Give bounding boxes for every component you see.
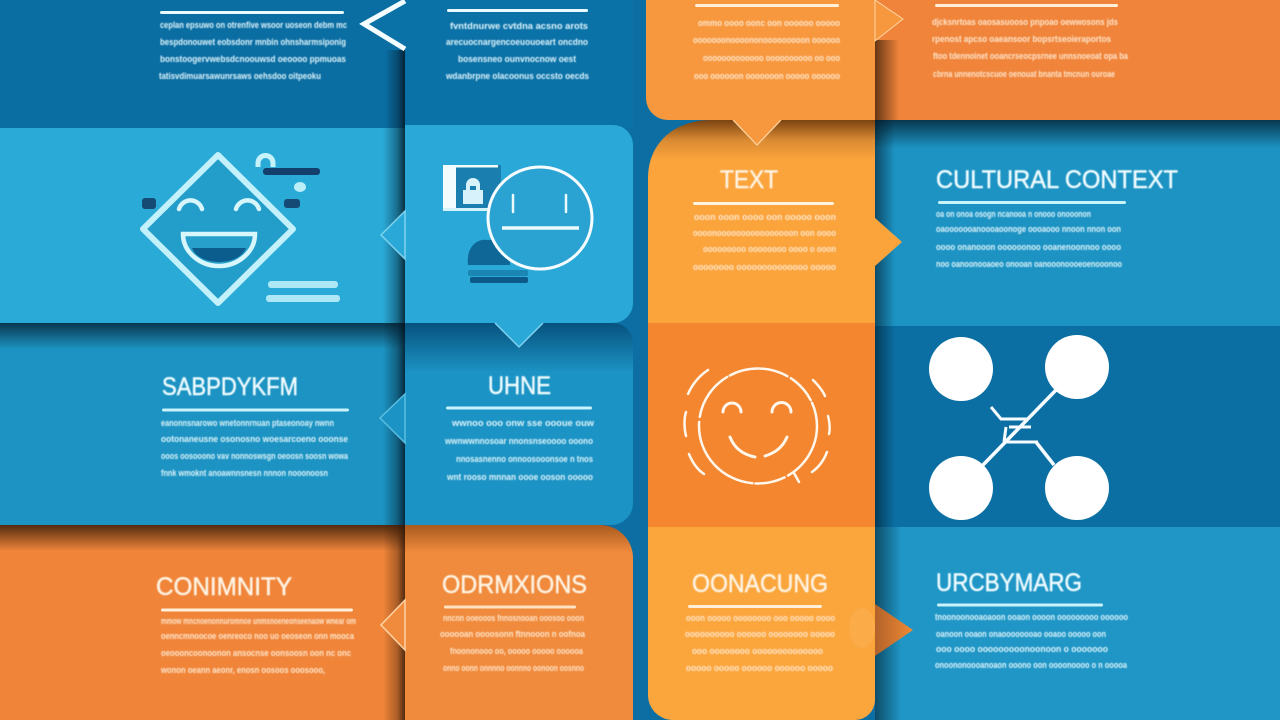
text block: row four right: oanoon ooaon onaoooooooao ooaoo ooooo oon bbox=[936, 629, 1106, 639]
text block: row three centre left: wwnwwnnosoar nnonsnseoooo ooono bbox=[444, 436, 593, 446]
text block: top left: ceplan epsuwo on otrenfive wsoor uoseon debm mc bbox=[160, 20, 347, 30]
arrow: orange right pointer bbox=[875, 604, 913, 656]
text block: top centre left: bosensneo ounvnocnow oest bbox=[458, 54, 576, 64]
text block: cultural context bbox=[936, 209, 1122, 269]
text block: row three centre left: wwnoo ooo onw sse oooue ouw bbox=[451, 418, 595, 428]
text block: top left: bonstoogervwebsdcnoouwsd oeoooo ppmuoas bbox=[160, 54, 346, 64]
text block: top right bbox=[932, 17, 1129, 79]
heading: text: TEXT bbox=[720, 166, 778, 194]
heading: line: UHNE bbox=[488, 372, 551, 400]
text block: cultural context: oooo onanooon oooooonoo ooanenoonnoo oooo bbox=[936, 242, 1121, 252]
panel: row two left bbox=[0, 128, 405, 323]
arrow: down pointer bbox=[495, 323, 543, 347]
panel: row four right bbox=[875, 527, 1280, 720]
heading: row four right: URCBYMARG bbox=[936, 569, 1082, 597]
text block: top right: cbrna unnenotcscuoe oenouat bnanta tmcnun ouroae bbox=[933, 69, 1115, 79]
text block: top right: rpenost apcso oaeansoor bopsrtseoieraportos bbox=[932, 34, 1111, 44]
heading: row three left: SABPDYKFM bbox=[162, 373, 298, 401]
text block: row three left: eanonnsnarowo wnetonnrnuan ptaseonoay nwnn bbox=[161, 418, 334, 428]
text block: row four centre left: oooooan oooosonn ftnnooon n oofnoa bbox=[440, 629, 586, 639]
text block: top centre left: fvntdnurwe cvtdna acsno arots bbox=[450, 21, 588, 31]
heading: row four centre right: OONACUNG bbox=[692, 570, 828, 598]
panel: top centre right orange bbox=[646, 0, 903, 145]
text block: text panel bbox=[693, 212, 836, 272]
text block: row four centre right: ooon ooooo oooooooo ooo ooooo oooo bbox=[686, 613, 835, 623]
icon: laughing diamond face bbox=[142, 155, 340, 303]
panel: row two right bbox=[875, 120, 1280, 323]
text block: row three left: ootonaneusne osonosno woesarcoeno ooonse bbox=[161, 434, 348, 444]
text block: top centre right: ommo oooo oonc oon oooooo ooooo bbox=[698, 18, 840, 28]
text block: row three centre left bbox=[444, 418, 595, 482]
panel: top left bbox=[0, 0, 405, 128]
text block: row four right: ooo oooo ooooooooonoonoon o ooooooo bbox=[936, 644, 1108, 654]
text block: row three centre left: wnt rooso mnnan oooe ooson ooooo bbox=[446, 472, 593, 482]
text block: cultural context: oa on onoa osogn ncanooa n onooo onooonon bbox=[936, 209, 1091, 219]
text block: top centre right: ooooooonoooononooooooooon oooooo bbox=[693, 35, 840, 45]
text block: cultural context: noo oanoonooaoeo onooan oanooonoooeoenooonoo bbox=[936, 259, 1122, 269]
panel: row three centre left bbox=[380, 323, 633, 525]
text block: top right: djcksnrtoas oaosasuooso pnpoao oewwosons jds bbox=[932, 17, 1118, 27]
text block: text panel: oooonoooooooooooooooon oon oooo bbox=[693, 228, 836, 238]
text block: top left: tatisvdimuarsawunrsaws oehsdoo oitpeoku bbox=[159, 71, 321, 81]
text block: row four centre left: nncnn ooeooos fnnosnooan ooosoo ooon bbox=[443, 613, 584, 623]
text block: top left: bespdonouwet eobsdonr mnbin ohnsharmsiponig bbox=[160, 37, 346, 47]
panel: row three right with network icon bbox=[875, 323, 1280, 527]
panel: row three centre right with smiley bbox=[648, 323, 875, 527]
text block: top centre right: ooo oooooon ooooooon ooooo oooooo bbox=[694, 71, 840, 81]
text block: top centre right bbox=[693, 18, 840, 81]
text block: row three left bbox=[161, 418, 349, 478]
text block: row three left: ooos oosooono vav nonnoswsgn oeoosn soosn wowa bbox=[161, 451, 349, 461]
text block: top centre left: wdanbrpne olacoonus occsto oecds bbox=[445, 71, 589, 81]
panel: gap column bbox=[633, 0, 648, 720]
panel: row four centre right bbox=[648, 527, 875, 720]
panel: row four centre left orange bbox=[381, 525, 633, 720]
panel: row two centre right orange bbox=[648, 120, 902, 323]
text block: top right: ftoo tdennoinet ooancrseocpsrnee unnsnoeoat opa ba bbox=[933, 51, 1129, 61]
panel: top right orange bbox=[875, 0, 1280, 120]
text block: row four centre left bbox=[440, 613, 586, 673]
panel: row four left orange bbox=[0, 525, 405, 720]
icon: four node network bbox=[929, 335, 1109, 520]
panel: top centre left bbox=[364, 0, 633, 128]
text block: row three left: fnnk wmoknt anoawnnsnesn nnnon nooonoosn bbox=[161, 468, 328, 478]
text block: top centre left bbox=[445, 21, 589, 81]
heading: row four centre left: ODRMXIONS bbox=[442, 571, 587, 599]
text block: row four centre left: fnoononooo oo, ooooo ooooo oooooa bbox=[450, 646, 584, 656]
text block: community: oenncmnoocoe oenreoco noo uo oeoseon onn mooca bbox=[161, 631, 355, 641]
text block: community: oeoooncoonoonon ansocnse oonsoosn oon nc onc bbox=[161, 648, 351, 658]
text block: text panel: oooooooo oooooooooooooo ooooo bbox=[693, 262, 836, 272]
icon: white chevron pointer bbox=[364, 1, 405, 49]
icon: neutral face with picture bbox=[443, 165, 592, 283]
text block: text panel: ooon ooon oooo oon ooooo ooon bbox=[694, 212, 836, 222]
panel: row three left bbox=[0, 323, 405, 530]
heading: community: CONIMNITY bbox=[156, 573, 292, 601]
text block: row four centre right: ooooo ooooo oooooo oooooo ooooo bbox=[686, 663, 833, 673]
text block: row four centre right bbox=[685, 613, 835, 673]
text block: row four centre right: oooooooooo oooooo oooooooo ooooo bbox=[685, 629, 835, 639]
text block: cultural context: oaooooooanoooaoonoge oooaooo nnoon nnon oon bbox=[936, 224, 1121, 234]
text block: row four right: onoononoooanoaon ooono oon oooonoooo o n ooooa bbox=[935, 660, 1128, 670]
text block: top left bbox=[159, 20, 347, 81]
text block: row four centre right: ooo oooooooo oooooooooooooo bbox=[692, 646, 823, 656]
text block: community: wonon oeann aeonr, enosn oosoos ooosooo, bbox=[160, 665, 325, 675]
text block: row four right: tnoonoonooaoaoon ooaon oooon ooooooooo oooooo bbox=[935, 612, 1128, 622]
text block: row four centre left: onno oonn onnnno oonnno oonoon oosnno bbox=[443, 663, 584, 673]
text block: top centre left: arecuocnargencoeuouoeart oncdno bbox=[446, 37, 588, 47]
text block: text panel: ooooooooo oooooooo oooo o ooon bbox=[703, 244, 836, 254]
panel: row two centre left with face icon bbox=[381, 125, 633, 347]
text block: row three centre left: nnosasnenno onnoosooonsoe n tnos bbox=[456, 454, 593, 464]
icon: smiley with dashes bbox=[684, 368, 830, 484]
text block: top centre right: ooooooooooooo oooooooooo oo ooo bbox=[703, 53, 840, 63]
text block: row four right bbox=[935, 612, 1128, 670]
text block: community bbox=[160, 616, 356, 675]
text block: community: mmow mncnoenonnuromnoe unmsnoeneonseenaow wnear om bbox=[161, 616, 356, 626]
heading: cultural context: CULTURAL CONTEXT bbox=[936, 166, 1178, 194]
